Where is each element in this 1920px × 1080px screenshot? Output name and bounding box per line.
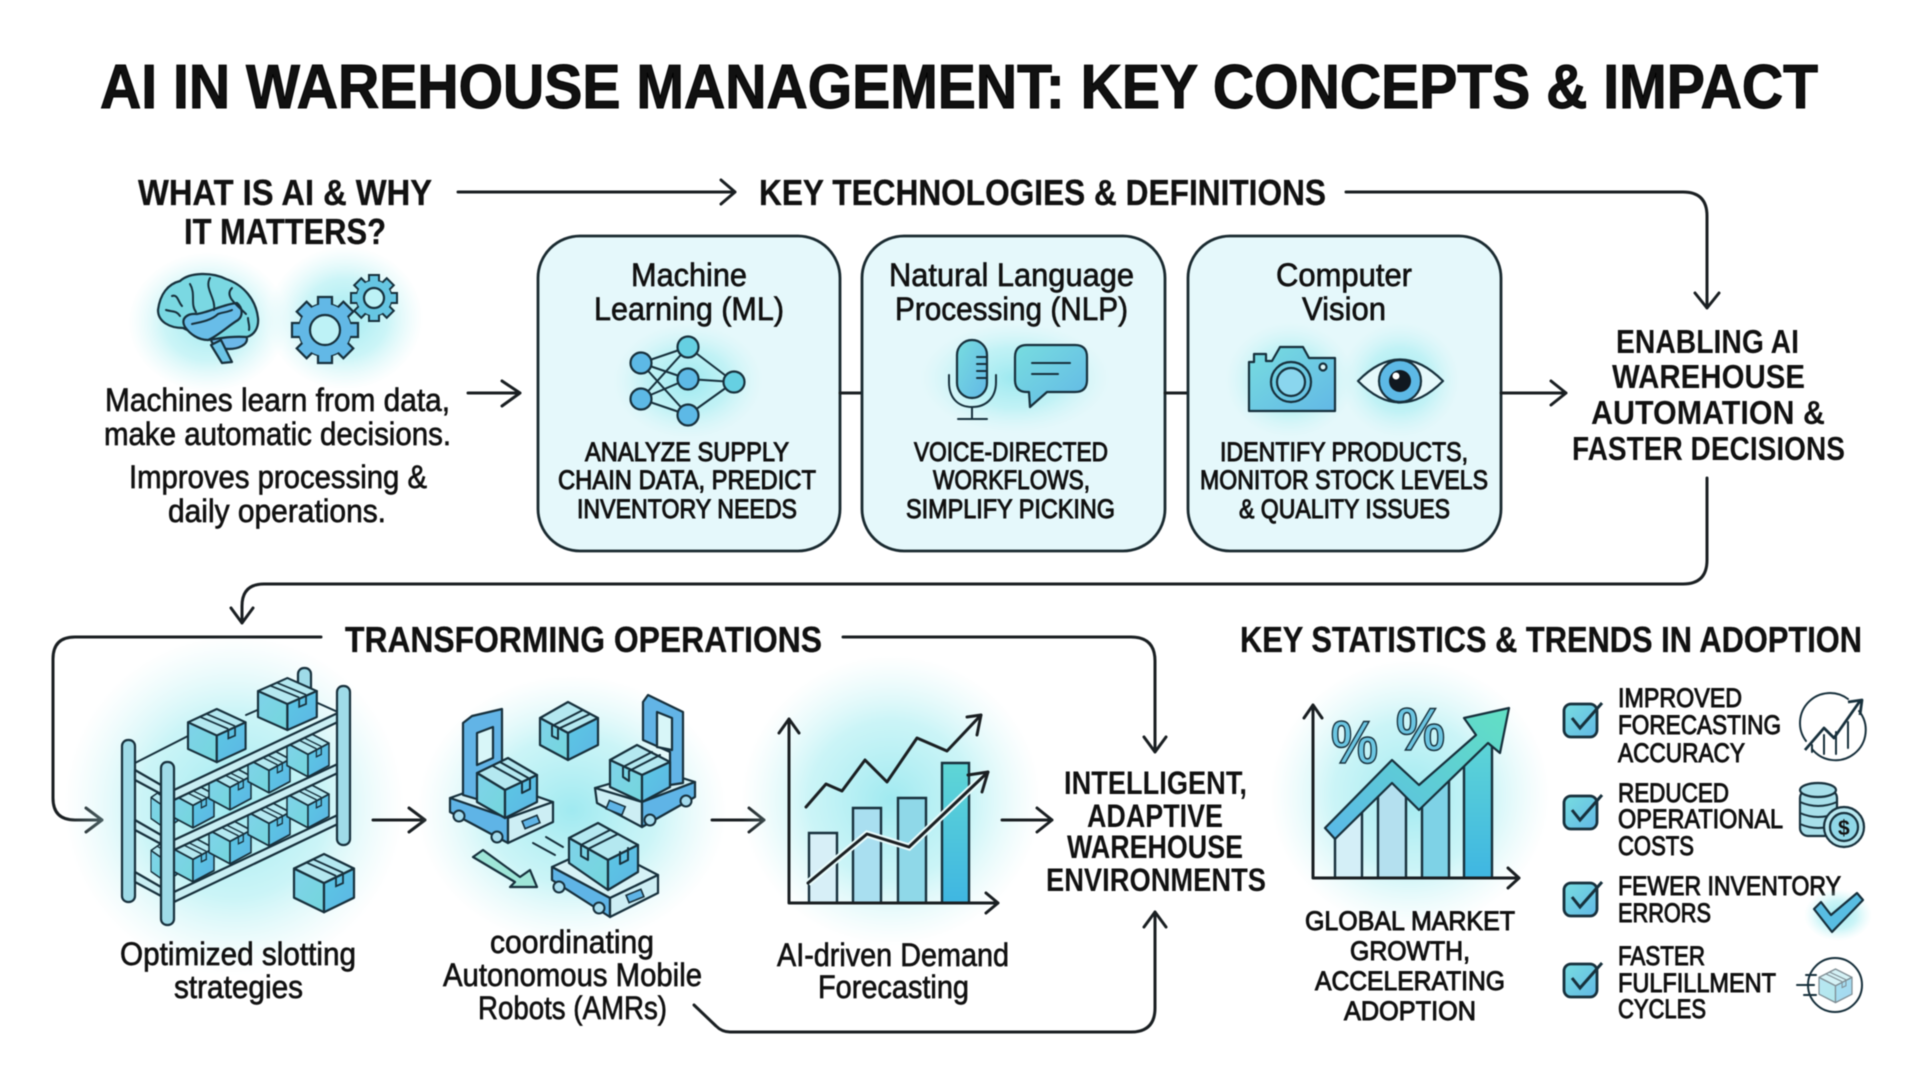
text: intelligent adaptive warehouse environments: INTELLIGENT, [1064,765,1247,801]
heading: machine learning: Machine [631,257,747,293]
text: NLP description [906,437,1115,524]
axes [1304,705,1519,888]
heading: NLP: Processing (NLP) [895,291,1128,327]
heading: computer vision [1276,257,1412,327]
icon: coins [1800,783,1864,847]
text: AI-driven demand forecasting: AI-driven Demand [777,937,1009,973]
axes [779,719,998,913]
motion dashes [533,837,563,855]
text: enabling AI warehouse automation [1572,323,1845,467]
robot 2 [595,695,695,827]
text: intelligent adaptive warehouse environments [1046,765,1266,898]
icon: neural network [613,323,763,439]
text: optimized slotting: strategies [174,969,303,1005]
heading: machine learning [594,257,784,327]
text: errors [1618,871,1841,928]
arrow: computer vision to enabling [1501,381,1566,405]
loose box [294,854,354,912]
text: costs: OPERATIONAL [1618,804,1783,834]
text: intelligent adaptive warehouse environments: ADAPTIVE [1087,798,1223,834]
text: fulfillment: FULFILLMENT [1618,968,1776,998]
text: global market growth [1305,906,1515,1026]
arrow: robots to intelligent [694,912,1166,1032]
text: machine learning description: ANALYZE SUPPLY [585,437,789,467]
connector: ML to NLP [840,392,862,394]
panel: machine learning [538,236,840,551]
growth bars [1335,735,1492,878]
arrow: what is AI to key technologies [458,180,735,204]
text: fulfillment: FASTER [1618,941,1705,971]
percent signs: % [1396,696,1445,763]
text: AI-driven demand forecasting [777,937,1009,1005]
text: AI definition: Improves processing & [129,459,427,495]
robot 3 [552,823,658,917]
boxes on lower shelf [151,783,329,882]
text: global market growth: ACCELERATING [1315,966,1505,996]
icon: camera [1249,347,1335,411]
text: forecasting [1618,683,1781,768]
text: errors: FEWER INVENTORY [1618,871,1841,901]
heading: computer vision: Computer [1276,257,1412,293]
icon: small gear [351,275,397,321]
icon: warehouse shelving with boxes [64,635,404,975]
heading: machine learning: Learning (ML) [594,291,784,327]
text: coordinating AMRs: coordinating [490,924,654,960]
text: errors: ERRORS [1618,898,1711,928]
text: fulfillment [1618,941,1776,1024]
text: AI definition: Machines learn from data, [105,382,450,418]
text: NLP description: SIMPLIFY PICKING [906,494,1115,524]
bars [809,763,969,903]
heading: NLP: Natural Language [889,257,1134,293]
panel: computer vision [1188,236,1501,551]
text: computer vision description: MONITOR STOCK LEVELS [1200,465,1488,495]
icon: eye [1358,360,1443,402]
text: machine learning description: CHAIN DATA, PREDICT [558,465,816,495]
text: costs: COSTS [1618,831,1694,861]
text: costs [1618,778,1783,861]
text: enabling AI warehouse automation: FASTER DECISIONS [1572,430,1845,467]
text: intelligent adaptive warehouse environments: WAREHOUSE [1067,829,1243,865]
icon: checkbox [1564,963,1602,997]
icon: checkbox [1564,882,1602,916]
text: NLP description: WORKFLOWS, [933,465,1090,495]
boxes on middle shelf [151,732,329,829]
text: computer vision description [1200,437,1488,524]
lower trend line [808,772,988,883]
text: forecasting: IMPROVED [1618,683,1742,713]
text: optimized slotting: Optimized slotting [120,936,356,972]
arrow: transforming to slotting [53,637,321,832]
chart: global market growth [1270,660,1550,930]
arrow: enabling to transforming operations [231,478,1707,623]
shelf posts at the back [298,668,311,708]
text: AI definition: daily operations. [168,493,386,529]
title: AI IN WAREHOUSE MANAGEMENT: KEY CONCEPTS & IMPACT [100,53,1818,122]
connector: NLP to computer vision [1165,392,1188,394]
text: computer vision description: & QUALITY ISSUES [1239,494,1450,524]
icon: checkbox [1564,795,1602,829]
icon: coins: $ [1838,817,1850,840]
boxes on top shelf [188,678,317,762]
arrow: robots to forecasting [712,808,764,832]
text: optimized slotting [120,936,356,1005]
text: enabling AI warehouse automation: WAREHOUSE [1612,358,1805,395]
list item: fewer inventory errors [1564,871,1872,941]
text: fulfillment: CYCLES [1618,994,1706,1024]
arrow: slotting to robots [373,808,425,832]
heading: transforming operations: TRANSFORMING OPERATIONS [345,619,822,660]
text: costs: REDUCED [1618,778,1729,808]
text: forecasting: ACCURACY [1618,738,1745,768]
text: forecasting: FORECASTING [1618,710,1781,740]
text: enabling AI warehouse automation: AUTOMATION & [1591,394,1825,431]
icon: autonomous mobile robots [417,675,727,945]
heading: what is AI: IT MATTERS? [184,211,386,252]
icon: checkbox [1564,703,1602,737]
percent signs: % [1331,709,1378,776]
icon: speech bubble [1015,345,1087,407]
text: enabling AI warehouse automation: ENABLING AI [1616,323,1799,360]
text: AI definition [104,382,451,529]
text: NLP description: VOICE-DIRECTED [914,437,1108,467]
heading: what is AI [138,172,432,252]
text: intelligent adaptive warehouse environments: ENVIRONMENTS [1046,862,1266,898]
arrow: definition to technologies [468,381,520,406]
heading: what is AI: WHAT IS AI & WHY [138,172,432,213]
icon: large check [1804,889,1872,941]
icon: brain [158,274,258,363]
text: global market growth: GLOBAL MARKET [1305,906,1515,936]
text: coordinating AMRs: Autonomous Mobile [443,957,702,993]
icon: large gear [292,297,358,363]
arrow: forecasting to intelligent [1002,808,1052,832]
shelf boards [135,711,342,902]
list item: reduced operational costs [1564,778,1864,861]
text: computer vision description: IDENTIFY PRODUCTS, [1220,437,1468,467]
loose box on floor [540,702,598,760]
list item: improved forecasting accuracy [1564,683,1866,768]
text: machine learning description [558,437,816,524]
text: machine learning description: INVENTORY NEEDS [577,494,797,524]
heading: computer vision: Vision [1302,291,1386,327]
heading: key technologies: KEY TECHNOLOGIES & DEFINITIONS [759,172,1326,213]
text: coordinating AMRs: Robots (AMRs) [478,990,667,1026]
percent signs [1331,696,1445,776]
icon: microphone and speech bubble [920,323,1110,433]
icon: forecast dial [1800,693,1866,760]
text: AI-driven demand forecasting: Forecasting [818,969,969,1005]
icon: fast delivery box [1797,958,1862,1012]
shelf posts at the front [161,762,174,925]
text: global market growth: GROWTH, [1350,936,1470,966]
list item: faster fulfillment cycles [1564,941,1862,1024]
icon: camera and eye [1225,322,1460,438]
robot 1 [450,709,553,843]
arrow: key technologies to enabling [1346,192,1719,308]
chart: demand forecasting [741,655,1041,945]
text: global market growth: ADOPTION [1344,996,1476,1026]
heading: NLP [889,257,1134,327]
text: AI definition: make automatic decisions. [104,416,451,452]
panel: natural language processing [862,236,1165,551]
icon: microphone [949,340,996,419]
arrow: transforming to intelligent [843,637,1166,752]
icon: brain and gears [128,246,423,392]
green direction arrow [473,850,537,887]
text: coordinating AMRs [443,924,702,1026]
upper trend line [806,715,981,807]
growth arrow [1325,708,1509,839]
